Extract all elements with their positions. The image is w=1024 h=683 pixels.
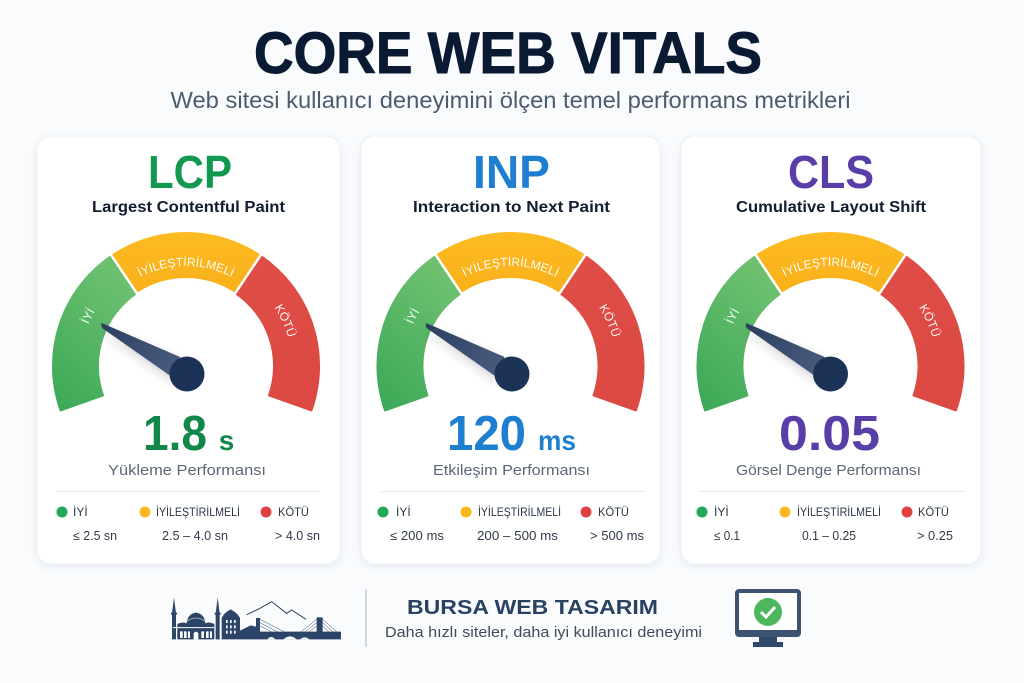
legend: İYİ — [714, 505, 729, 519]
gauge: LCP — [52, 232, 320, 412]
legend: 2.5 – 4.0 sn — [162, 529, 228, 543]
gauge: LCP: İYİLEŞTİRİLMELİ — [136, 256, 236, 277]
icon: monitor with check — [735, 589, 801, 647]
legend — [56, 505, 320, 543]
gauge: INP: İYİLEŞTİRİLMELİ — [461, 256, 560, 277]
legend — [378, 505, 644, 543]
legend: > 4.0 sn — [275, 529, 320, 543]
legend: İYİ — [73, 505, 88, 519]
value: 120 ms: 120 — [447, 407, 526, 461]
caption: Etkileşim Performansı — [433, 463, 590, 479]
gauge: INP: KÖTÜ — [599, 304, 622, 336]
legend: KÖTÜ — [598, 505, 629, 519]
legend: 200 – 500 ms — [477, 529, 558, 543]
legend: > 500 ms — [590, 529, 644, 543]
gauge: CLS: İYİLEŞTİRİLMELİ — [781, 256, 880, 277]
caption: Görsel Denge Performansı — [736, 463, 921, 479]
panel: LCP — [36, 136, 342, 568]
caption: Yükleme Performansı — [108, 463, 266, 479]
gauge: CLS: İYİ — [724, 307, 739, 324]
subheading: Cumulative Layout Shift: Cumulative Layout Shift — [736, 199, 927, 216]
legend: İYİ — [396, 505, 411, 519]
heading: CLS: CLS — [788, 146, 874, 198]
gauge: LCP: KÖTÜ — [274, 304, 297, 336]
footer heading: BURSA WEB TASARIM — [407, 597, 658, 619]
value: 1.8 s: 1.8 — [143, 407, 207, 461]
value: 120 ms — [447, 407, 576, 461]
value: 0.05: 0.05 — [779, 407, 880, 461]
value: 1.8 s: s — [219, 425, 234, 456]
gauge: INP — [376, 232, 645, 412]
subheading: Largest Contentful Paint: Largest Contentful Paint — [92, 199, 286, 216]
legend: KÖTÜ — [918, 505, 949, 519]
legend: İYİLEŞTİRİLMELİ — [797, 505, 881, 519]
icon: Bursa skyline — [171, 597, 341, 639]
panel: INP — [360, 136, 662, 568]
gauge: LCP: İYİ — [79, 307, 94, 324]
subheading: Interaction to Next Paint: Interaction to Next Paint — [413, 199, 611, 216]
legend: İYİLEŞTİRİLMELİ — [478, 505, 561, 519]
gauge: CLS: KÖTÜ — [919, 304, 942, 336]
panel: CLS — [680, 136, 982, 568]
legend: ≤ 200 ms — [390, 529, 444, 543]
value: 120 ms: ms — [538, 425, 576, 456]
heading: INP: INP — [473, 146, 550, 198]
title: CORE WEB VITALS — [254, 21, 762, 86]
subtitle: Web sitesi kullanıcı deneyimini ölçen temel performans metrikleri — [170, 87, 850, 113]
legend — [696, 505, 953, 543]
heading: LCP: LCP — [148, 146, 232, 198]
legend: ≤ 2.5 sn — [73, 529, 117, 543]
legend: 0.1 – 0.25 — [802, 529, 856, 543]
gauge: CLS — [696, 232, 965, 412]
legend: ≤ 0.1 — [714, 529, 740, 543]
legend: İYİLEŞTİRİLMELİ — [156, 505, 240, 519]
legend: KÖTÜ — [278, 505, 309, 519]
footer tagline: Daha hızlı siteler, daha iyi kullanıcı deneyimi — [385, 625, 702, 641]
gauge: INP: İYİ — [404, 307, 419, 324]
legend: > 0.25 — [917, 529, 953, 543]
